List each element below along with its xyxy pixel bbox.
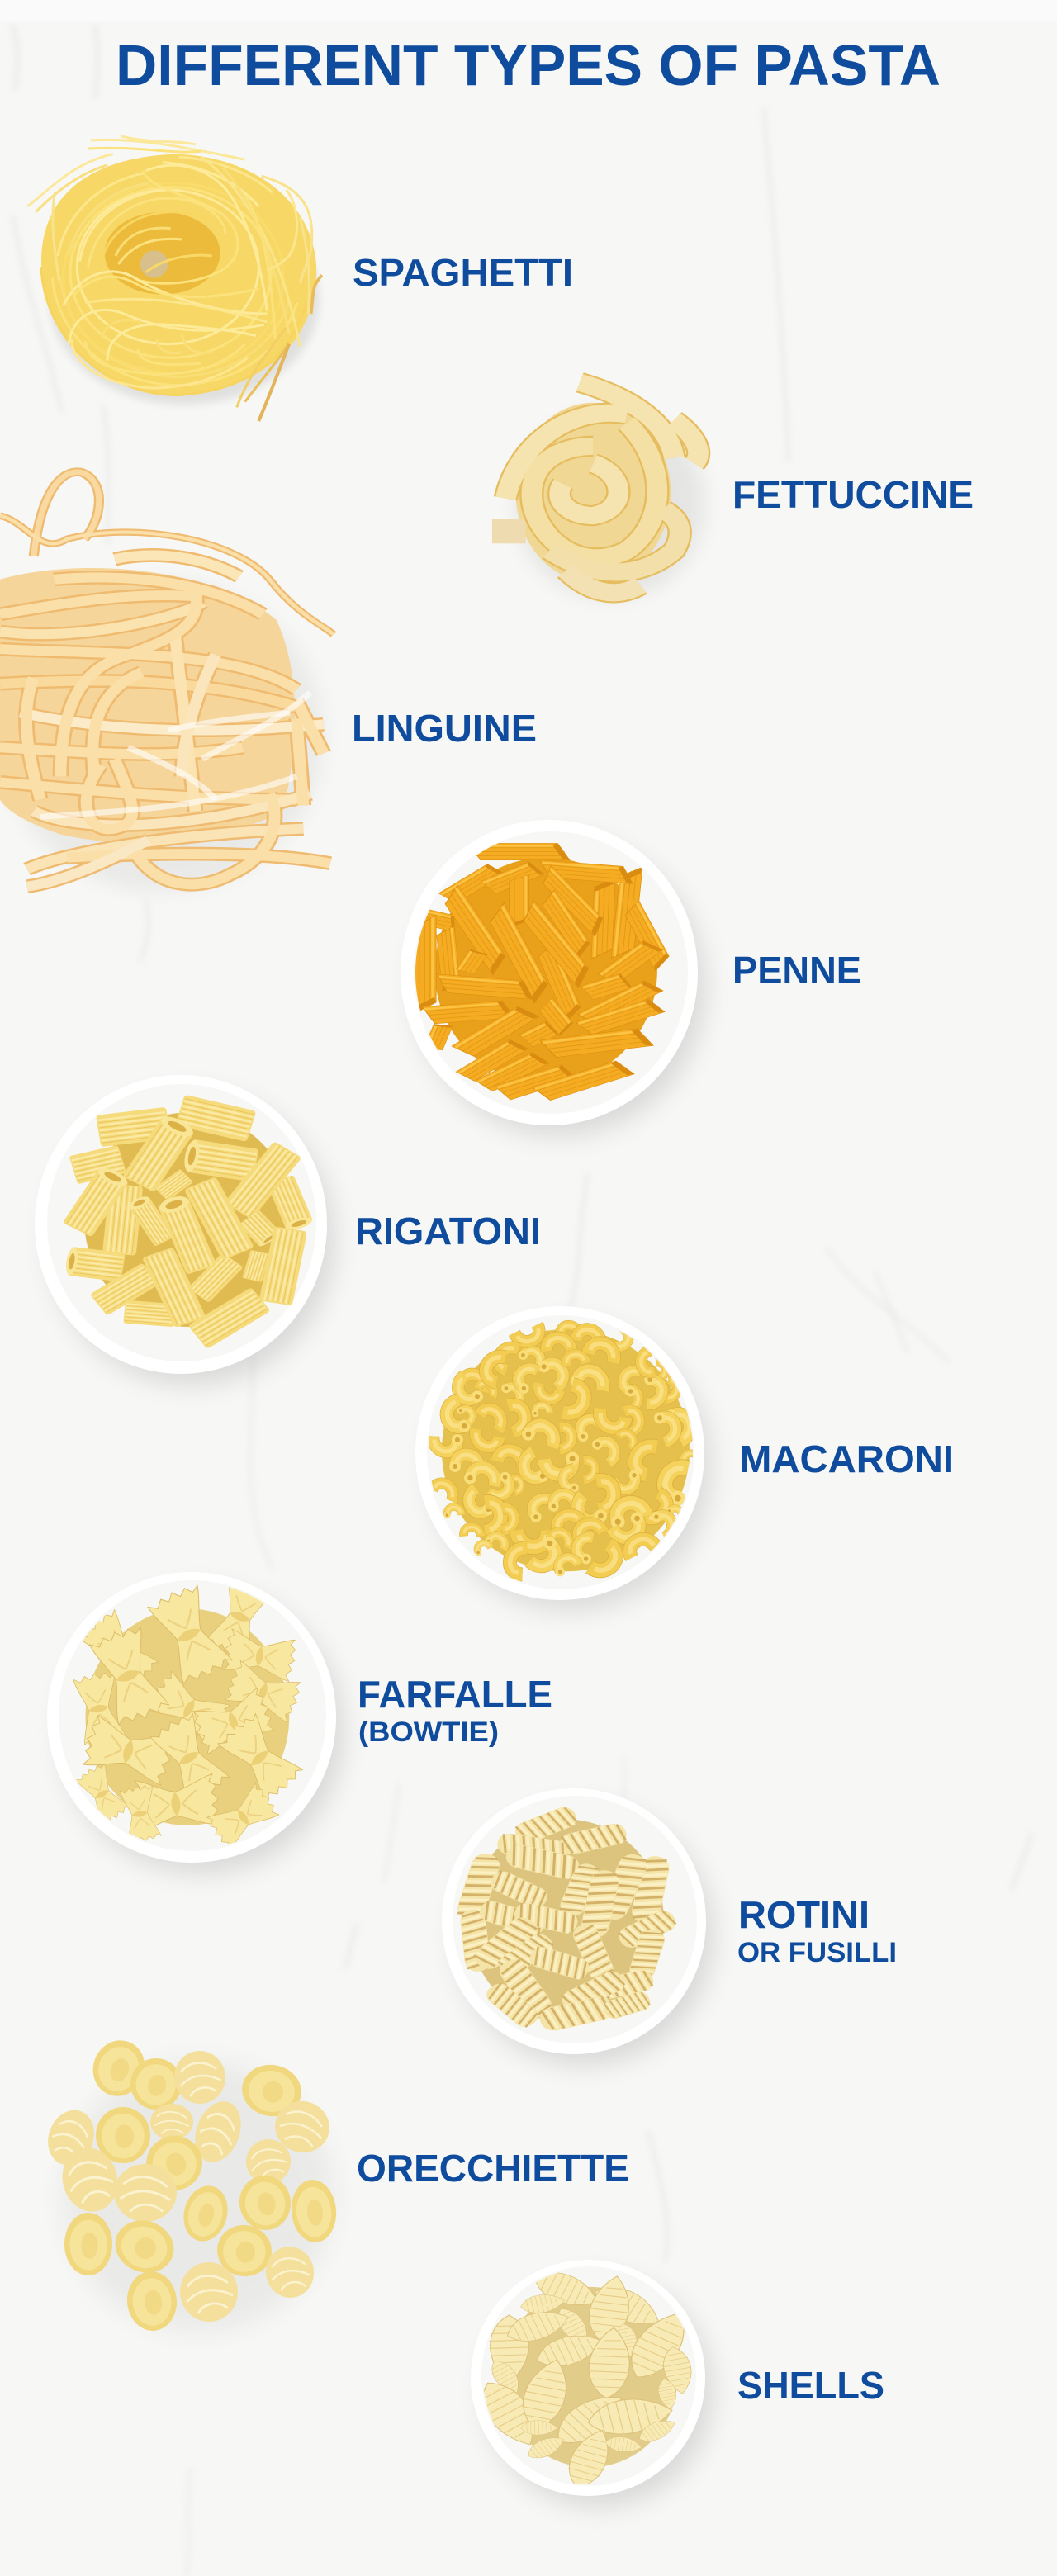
- label: macaroni: MACARONI: [739, 1437, 954, 1480]
- bowl: macaroni: [415, 1306, 712, 1611]
- label: penne: PENNE: [732, 949, 861, 992]
- bowl: shells: [470, 2260, 713, 2507]
- label: spaghetti: SPAGHETTI: [353, 251, 573, 294]
- label: orecchiette: ORECCHIETTE: [357, 2147, 629, 2190]
- label: rotini: ROTINI: [738, 1893, 870, 1936]
- pasta: linguine pile: [0, 472, 334, 893]
- pasta: fettuccine nest: [492, 382, 704, 599]
- label: fusilli sublabel: OR FUSILLI: [737, 1937, 897, 1968]
- pasta: spaghetti nest: [27, 136, 322, 421]
- label: fettuccine: FETTUCCINE: [732, 473, 974, 516]
- title: DIFFERENT TYPES OF PASTA: [116, 33, 941, 97]
- label: rigatoni: RIGATONI: [355, 1210, 541, 1252]
- label: shells: SHELLS: [737, 2364, 884, 2407]
- bowl: rotini: [442, 1788, 713, 2065]
- pasta: orecchiette scatter: [40, 2033, 339, 2332]
- label: bowtie sublabel: (BOWTIE): [358, 1717, 499, 1748]
- bowl: penne: [401, 820, 705, 1135]
- label: farfalle: FARFALLE: [358, 1673, 552, 1716]
- bowl: rigatoni: [35, 1075, 334, 1385]
- bowl: farfalle: [47, 1572, 344, 1873]
- label: linguine: LINGUINE: [352, 707, 537, 750]
